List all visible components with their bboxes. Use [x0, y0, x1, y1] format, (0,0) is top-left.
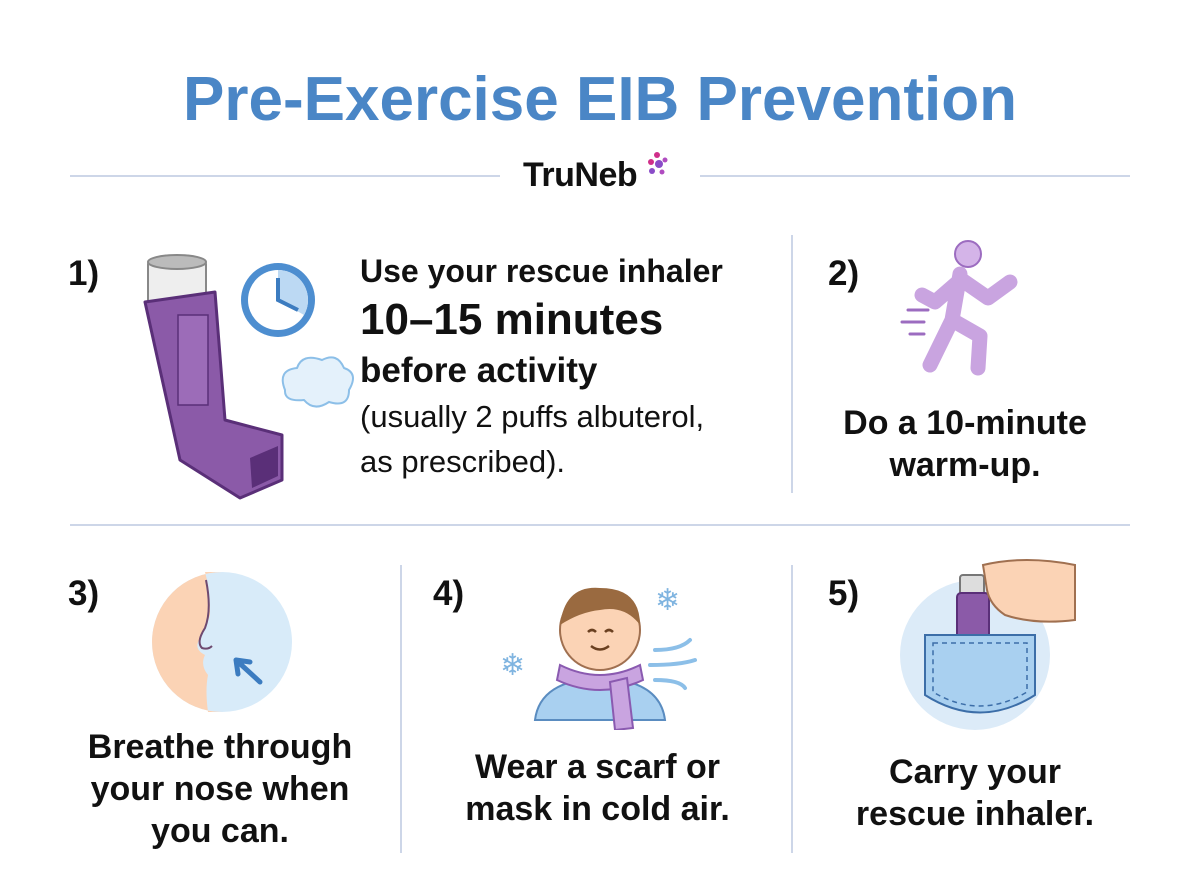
text block: (usually 2 puffs albuterol,: [360, 399, 704, 434]
text block: 10–15 minutes: [360, 295, 663, 344]
panel: step 1: [68, 253, 723, 500]
title: Pre-Exercise EIB Prevention: [183, 65, 1017, 134]
caption: warm-up.: [889, 446, 1041, 484]
icon: child in scarf: ❄: [655, 584, 680, 617]
caption: Do a 10-minute: [843, 404, 1087, 442]
caption: rescue inhaler.: [856, 795, 1094, 833]
text block: as prescribed).: [360, 444, 565, 479]
icon: inhaler with clock and puff: [144, 254, 354, 500]
text block: Use your rescue inhaler: [360, 253, 723, 289]
caption: mask in cold air.: [465, 790, 730, 828]
panel: step 4: [433, 574, 730, 828]
panel: step 3: [68, 572, 352, 850]
number 5: 5): [828, 574, 859, 613]
text block: before activity: [360, 351, 597, 390]
icon: inhaler in pocket: [900, 559, 1076, 730]
caption: Carry your: [889, 753, 1061, 791]
text block: [360, 253, 723, 479]
number 1: 1): [68, 254, 99, 293]
panel: step 2: [828, 240, 1087, 484]
panel: step 5: [828, 559, 1094, 833]
icon: nose breathing: [152, 572, 292, 712]
number 3: 3): [68, 574, 99, 613]
caption: Breathe through: [88, 728, 352, 766]
caption: your nose when: [91, 770, 349, 808]
caption: [465, 748, 730, 828]
icon: child in scarf: [500, 584, 697, 730]
caption: you can.: [151, 812, 289, 850]
icon: child in scarf: ❄: [500, 649, 525, 682]
number 4: 4): [433, 574, 464, 613]
caption: [856, 753, 1094, 833]
caption: [88, 728, 352, 850]
caption: Wear a scarf or: [475, 748, 720, 786]
number 2: 2): [828, 254, 859, 293]
logo: TruNeb: TruNeb: [523, 156, 637, 194]
icon: runner: [900, 240, 1018, 376]
caption: [843, 404, 1087, 484]
